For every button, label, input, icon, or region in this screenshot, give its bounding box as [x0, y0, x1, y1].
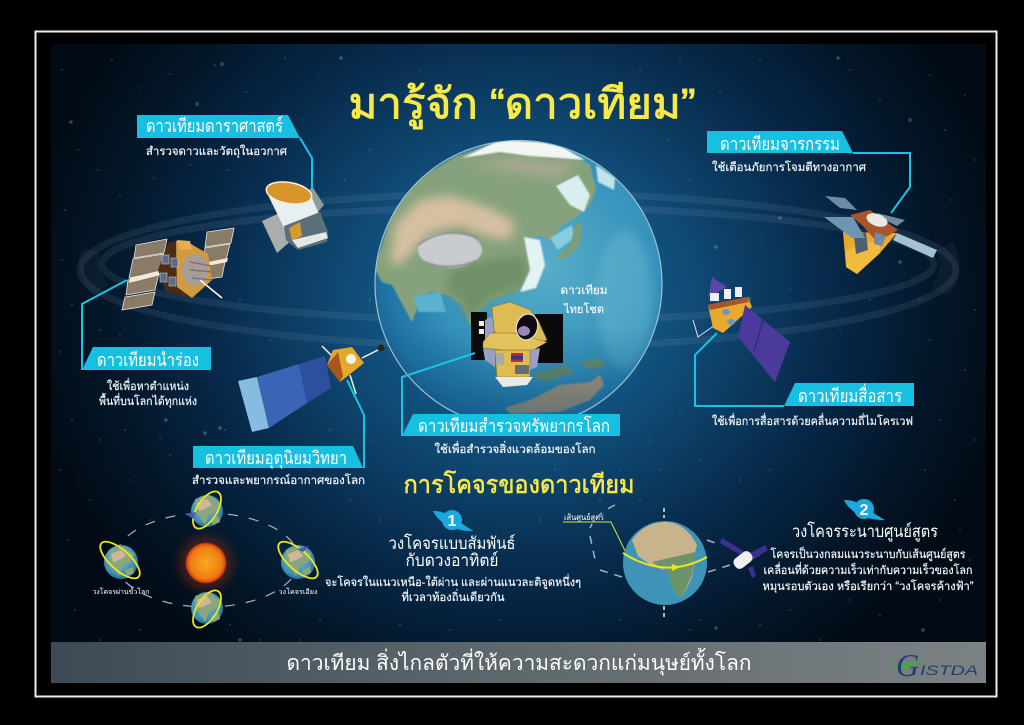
logo: GISTDA: ISTDA: [920, 662, 978, 678]
southeast asia islands: [530, 358, 606, 382]
diagram: equatorial orbit: [563, 505, 768, 618]
label: astronomy satellite: สำรวจดาวและวัตถุในอวกาศ: [146, 145, 288, 158]
label: earth resources satellite: [402, 353, 620, 456]
title: มารู้จัก “ดาวเทียม”: [348, 80, 696, 129]
communication satellite: [693, 277, 790, 382]
australia: [505, 375, 604, 414]
orbit rings: [80, 193, 956, 347]
bottom shading: [408, 344, 646, 414]
thai earth observation satellite: [471, 302, 563, 387]
label: reconnaissance satellite: [707, 131, 910, 213]
label: meteorological satellite: [192, 380, 365, 487]
orbit type 2 text block: เคลื่อนที่ด้วยความเร็วเท่ากับความเร็วของโลก: [764, 562, 973, 577]
northern snow cap: [462, 140, 585, 160]
earth left: [95, 536, 145, 584]
heading: orbits: การโคจรของดาวเทียม: [404, 470, 634, 499]
label text: thaichote satellite: ดาวเทียม: [560, 284, 608, 297]
label text: thaichote satellite: ไทยโชต: [563, 302, 604, 316]
japan islands: [556, 222, 582, 258]
small earth: [623, 521, 707, 605]
label: meteorological satellite: ดาวเทียมอุตุนิยมวิทยา: [205, 448, 347, 469]
label: navigation satellite: พื้นที่บนโลกได้ทุกแห่ง: [99, 393, 197, 408]
logo: GISTDA: [888, 647, 978, 683]
equator caption: เส้นศูนย์สูตร: [564, 512, 605, 523]
earth globe: [374, 140, 662, 428]
diagram: sun-synchronous orbit: [92, 487, 323, 632]
desert and steppe tones: [390, 195, 515, 265]
badge: number 1: [433, 510, 473, 531]
label: navigation satellite: ใช้เพื่อหาตำแหน่ง: [107, 378, 189, 393]
globe rim: [375, 140, 662, 428]
badge: number 1: 1: [448, 513, 457, 530]
label: navigation satellite: ดาวเทียมนำร่อง: [97, 350, 199, 370]
reconnaissance satellite: [824, 196, 937, 274]
orbit type 1 text block: กับดวงอาทิตย์: [406, 551, 498, 570]
footer slogan: ดาวเทียม สิ่งไกลตัวที่ให้ความสะดวกแก่มนุษย์ทั้งโลก: [286, 648, 752, 676]
orbit type 2 text block: หมุนรอบตัวเอง หรือเรียกว่า “วงโคจรค้างฟ้า”: [762, 579, 974, 593]
orbit type 1 text block: ที่เวลาท้องถิ่นเดียวกัน: [402, 589, 505, 604]
astronomy satellite: [262, 179, 328, 253]
footer bar: [51, 642, 986, 683]
orbit type 1 text block: จะโคจรในแนวเหนือ-ใต้ผ่าน และผ่านแนวละติจูดหนึ่งๆ: [325, 574, 581, 589]
orbit type 1 text block: [325, 510, 581, 604]
orbit type 2 text block: [762, 499, 974, 593]
inclined orbit caption: วงโคจรเอียง: [278, 587, 318, 596]
darker southern forests: [445, 255, 528, 322]
orbit type 2 text block: โคจรเป็นวงกลมแนวระนาบกับเส้นศูนย์สูตร: [770, 546, 966, 561]
label: communication satellite: ใช้เพื่อการสื่อสารด้วยคลื่นความถี่ไมโครเวฟ: [712, 413, 913, 428]
sun: [179, 536, 233, 590]
weather satellite with sensor beam: [238, 344, 384, 432]
label: communication satellite: ดาวเทียมสื่อสาร: [798, 383, 902, 406]
geostationary satellite: [720, 538, 768, 578]
earth right: [273, 536, 323, 584]
label: reconnaissance satellite: ดาวเทียมจารกรรม: [720, 134, 840, 154]
label: meteorological satellite: สำรวจและพยากรณ์อากาศของโลก: [192, 473, 365, 487]
ocean highlights: [597, 230, 653, 370]
northern taupe tundra: [470, 158, 575, 178]
polar orbit caption: วงโคจรผ่านขั้วโลก: [92, 585, 150, 596]
label: communication satellite: [695, 333, 914, 428]
label text: thaichote satellite: [560, 284, 608, 316]
tibetan plateau: [418, 232, 482, 268]
label: navigation satellite: [82, 280, 211, 408]
label: astronomy satellite: [137, 115, 312, 188]
sea of japan and yellow sea shallows: [414, 165, 615, 312]
equator caption: [563, 512, 628, 557]
logo: GISTDA: G: [896, 647, 919, 683]
asia landmass: [374, 141, 596, 362]
label: earth resources satellite: ดาวเทียมสำรวจทรัพยากรโลก: [418, 415, 610, 436]
navigation satellite: [122, 228, 234, 310]
label: astronomy satellite: ดาวเทียมดาราศาสตร์: [146, 116, 283, 136]
orbit type 2 text block: วงโคจรระนาบศูนย์สูตร: [792, 521, 938, 542]
badge: number 2: [844, 499, 885, 520]
label: reconnaissance satellite: ใช้เตือนภัยการโจมตีทางอากาศ: [712, 160, 867, 174]
earth top: [185, 487, 227, 533]
orbit type 1 text block: วงโคจรแบบสัมพันธ์: [388, 533, 516, 553]
badge: number 2: 2: [860, 502, 869, 519]
earth bottom: [187, 586, 227, 632]
label: earth resources satellite: ใช้เพื่อสำรวจสิ่งแวดล้อมของโลก: [434, 441, 596, 456]
